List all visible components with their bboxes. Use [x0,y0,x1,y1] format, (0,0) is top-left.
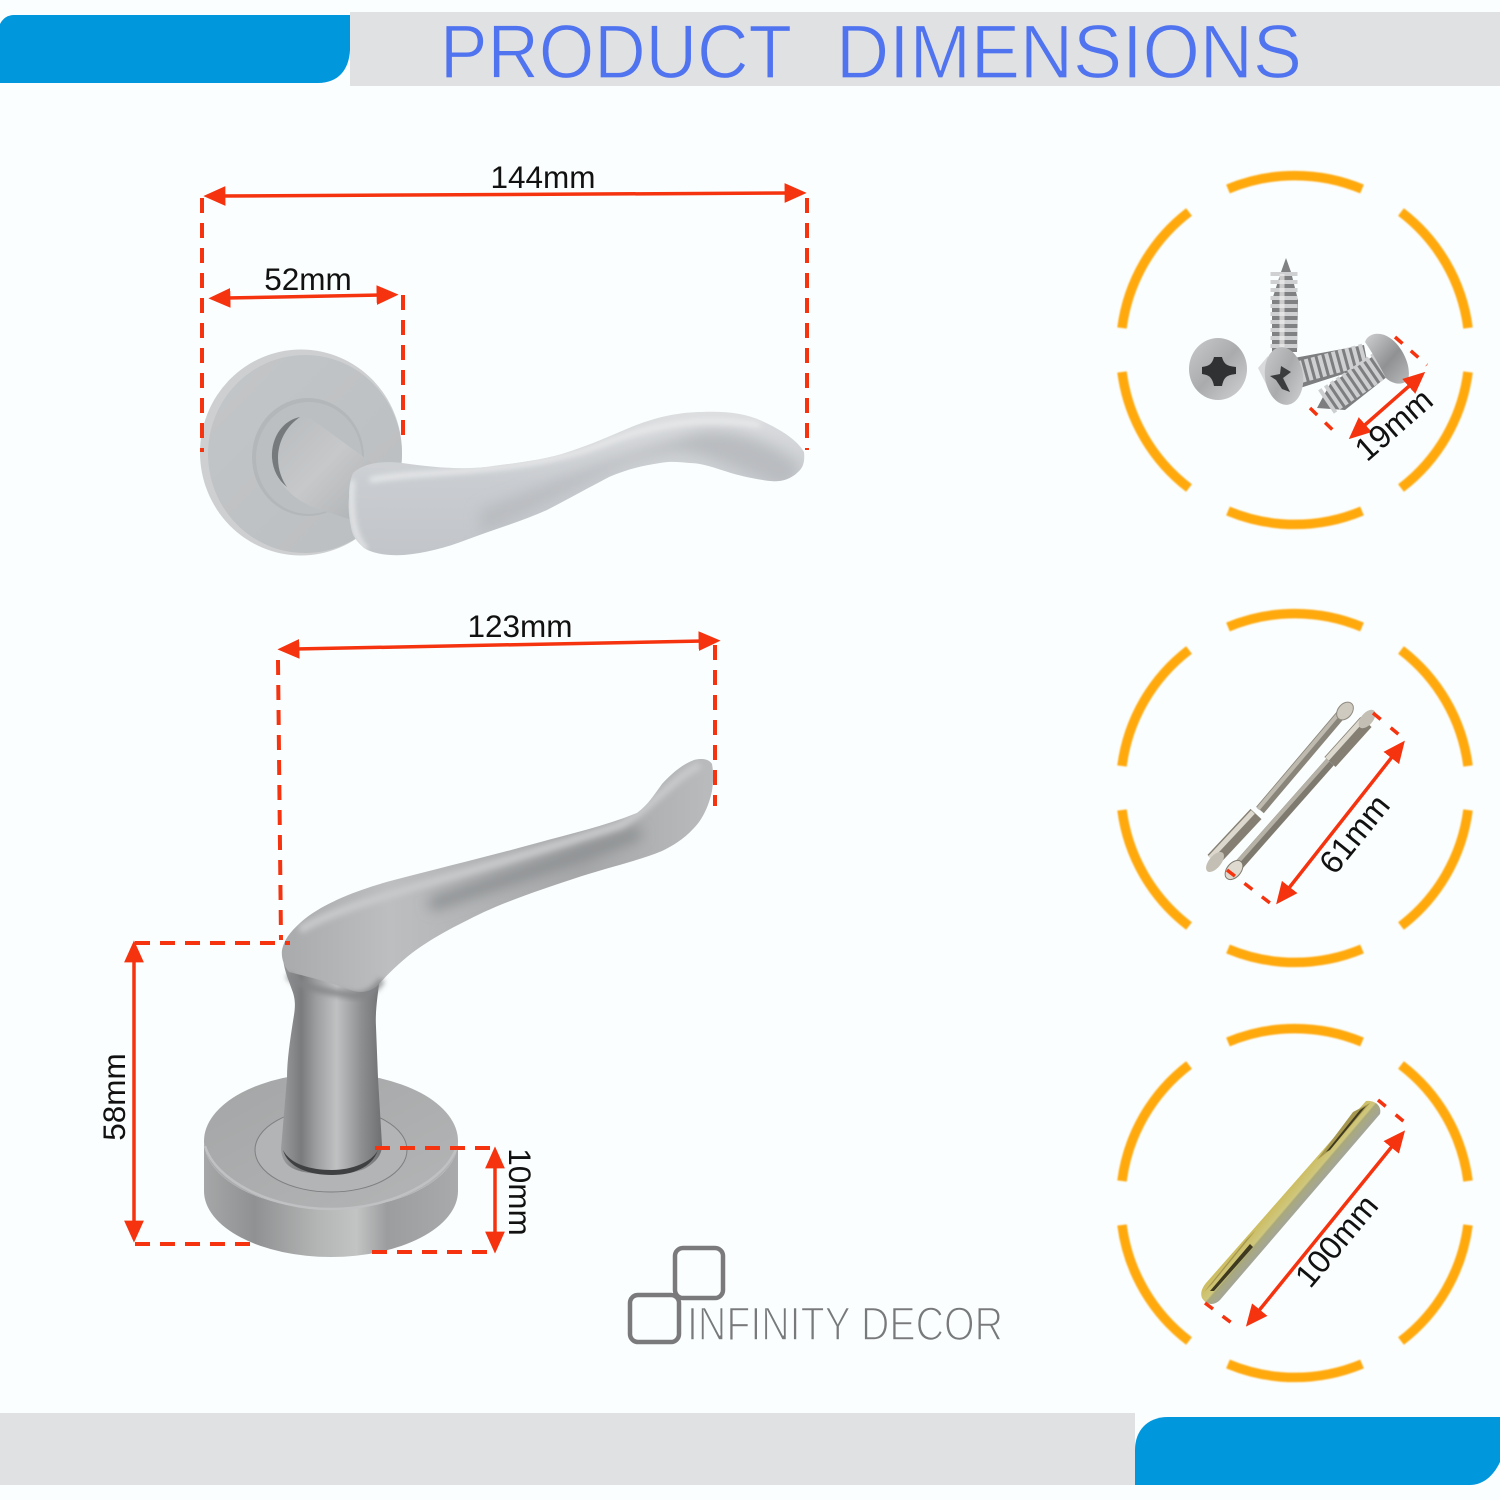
title: PRODUCT [440,10,792,95]
dimension: 58mm: 58mm [96,1053,132,1141]
screw: head-on, cross recess [1189,338,1247,400]
dimension: 10mm: 10mm [502,1148,538,1236]
dashed orange ring [1122,614,1468,962]
screw: lying, cone head [1317,334,1409,410]
dashed orange ring [1122,176,1468,524]
screw: upright [1258,258,1368,407]
panel: screws, 19mm [1122,176,1468,524]
dimension: 52mm: 52mm [264,261,352,297]
dimension: 61mm [1227,713,1403,903]
door handle, front view [200,350,804,556]
panel: top view handle with dimensions [200,159,807,556]
door handle, side view [204,759,713,1257]
dimension: 123mm [278,608,715,940]
dimension: 100mm [1205,1100,1408,1327]
logo wordmark: INFINITY DECOR [687,1297,1003,1350]
panel: connecting bolts, 61mm [1122,614,1468,962]
logo: Infinity Decor [630,1248,1003,1350]
dimension: 144mm [202,159,807,452]
footer band [0,1413,1500,1485]
dimension: 100mm: 100mm [1288,1188,1385,1294]
header grey bar [350,12,1500,86]
panel: side view handle with dimensions [96,608,715,1257]
header band [0,10,1500,95]
spindle [1201,1101,1380,1304]
dimension: 144mm: 144mm [490,159,596,195]
logo icon: two rounded squares [630,1248,723,1342]
dimension: 52mm [226,261,403,437]
title [440,10,1302,95]
dimension: 19mm [1310,337,1440,468]
left bolt [1203,699,1357,875]
panel: spindle, 100mm [1122,1029,1468,1377]
footer blue tab [1135,1417,1500,1485]
dashed orange ring [1122,1029,1468,1377]
title: DIMENSIONS [836,10,1302,95]
dimension: 61mm: 61mm [1312,788,1397,880]
header blue tab [0,15,350,83]
right bolt [1222,707,1379,883]
footer grey bar [0,1413,1135,1485]
screws [1189,258,1409,410]
dimension: 19mm: 19mm [1348,381,1440,468]
connecting bolts [1203,699,1379,883]
dimension: 123mm: 123mm [467,608,573,644]
